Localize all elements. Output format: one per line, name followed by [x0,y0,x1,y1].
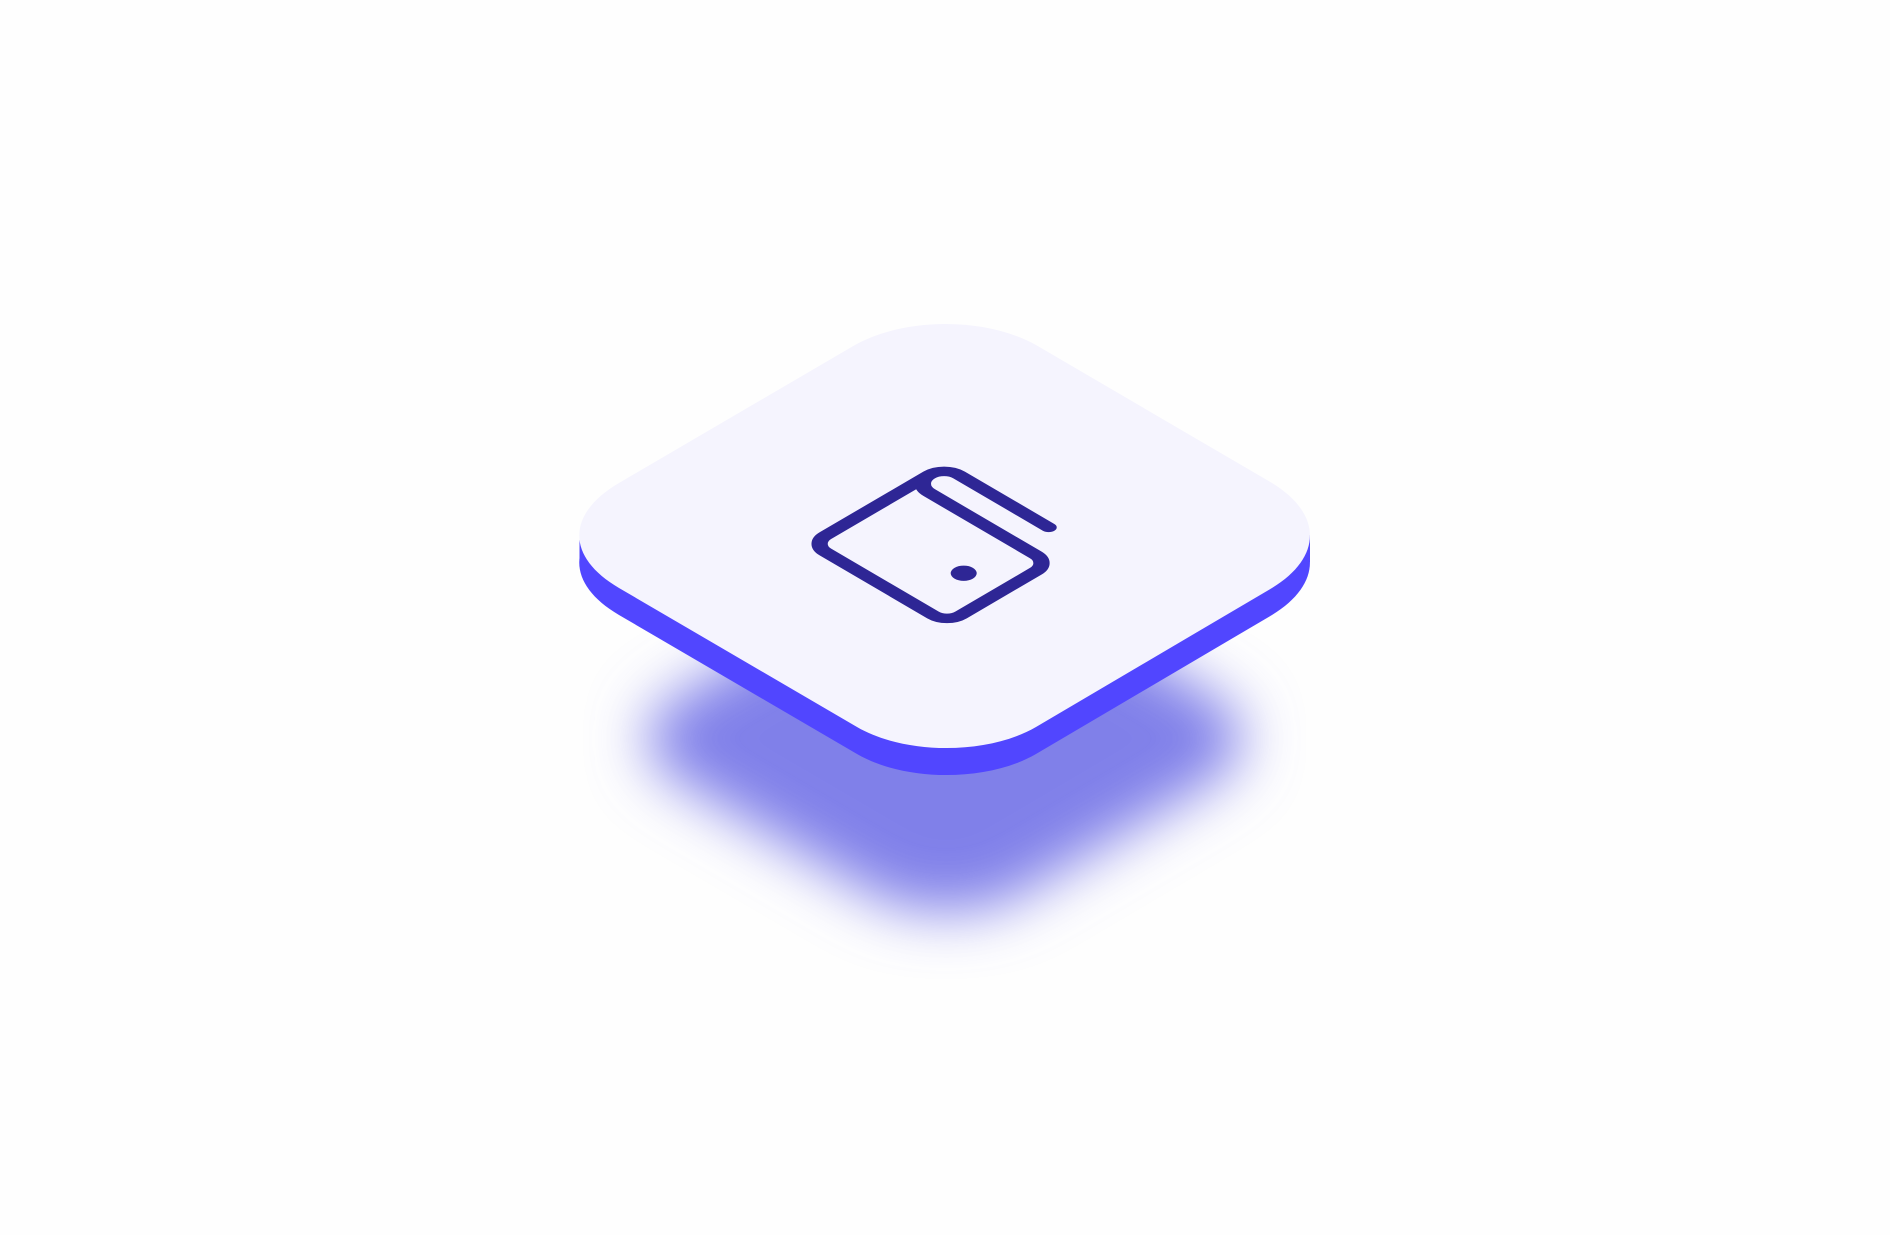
blurred drop shadow [647,566,1242,912]
tile side (blue thickness) [579,351,1310,775]
wallet outline with flap [811,466,1080,623]
wallet clasp dot [945,562,982,584]
icon: wallet [811,466,1080,623]
tile top face [579,324,1310,748]
